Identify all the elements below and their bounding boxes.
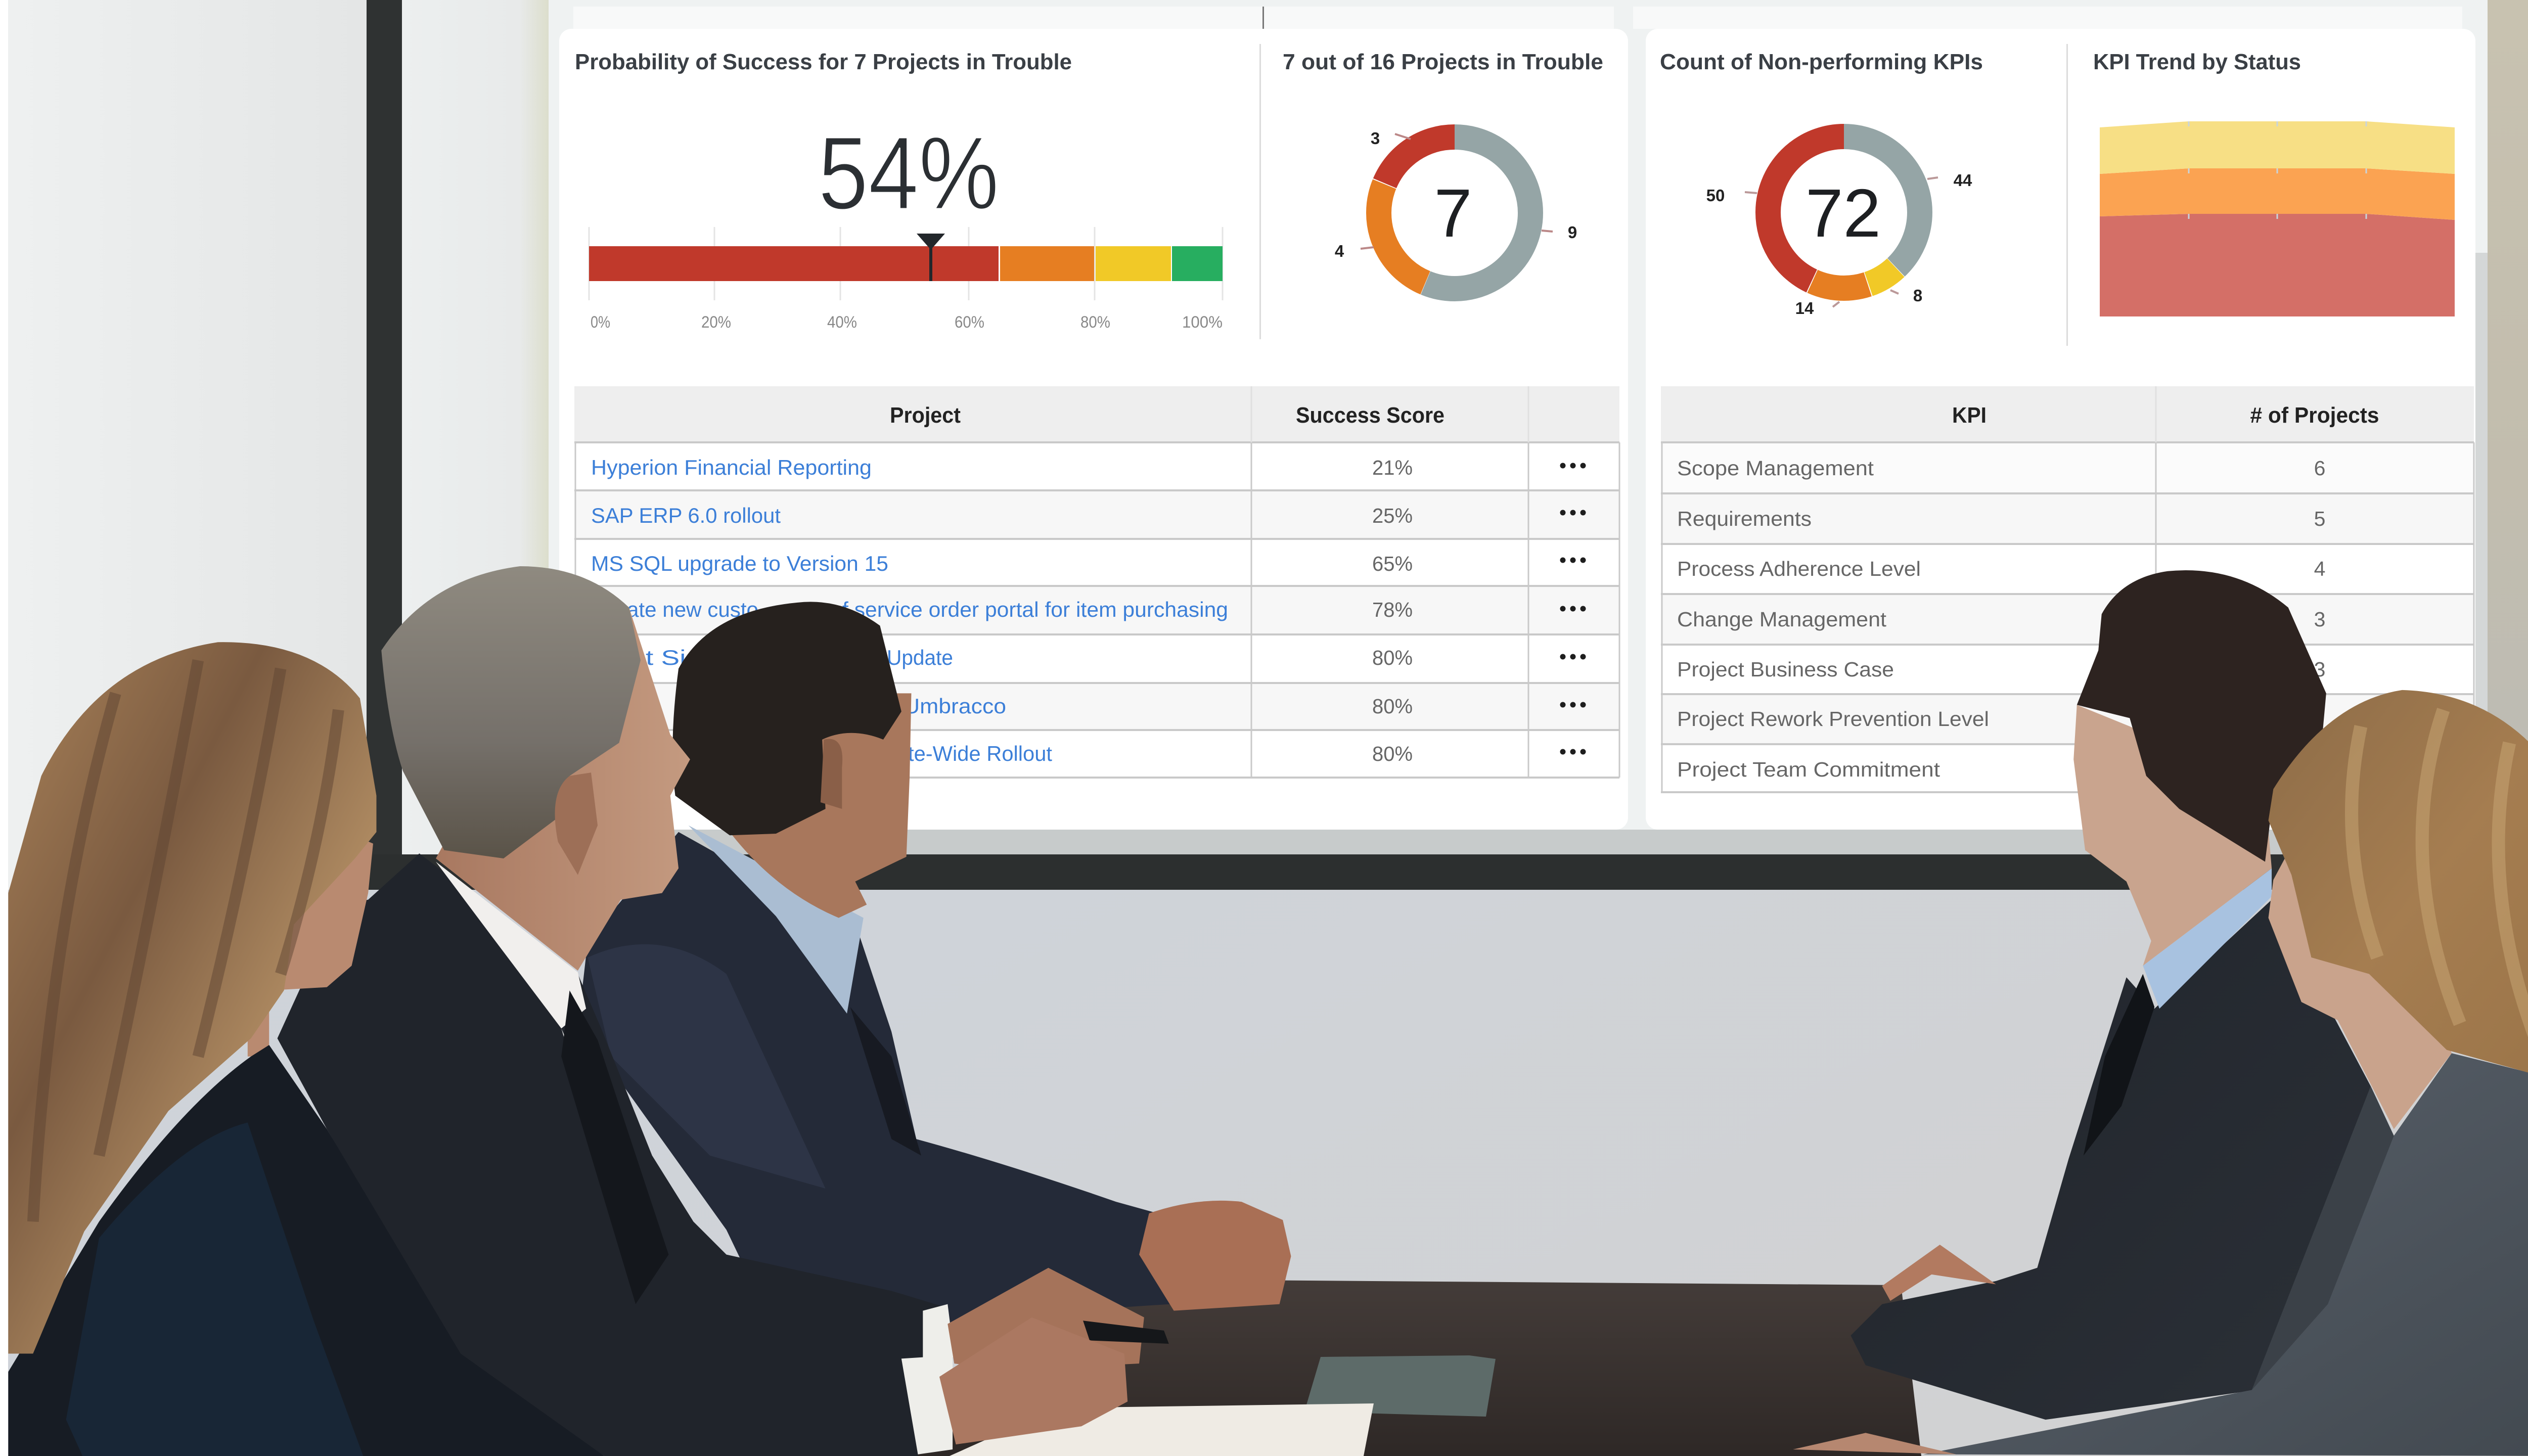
- table header: success score: Success Score: [1296, 403, 1444, 428]
- success scores: 21%: [1372, 456, 1413, 479]
- KPI project counts: 5: [2314, 507, 2325, 530]
- stacked area chart: [2100, 121, 2455, 316]
- donut chart: non-performing KPIs: 8: [1913, 286, 1922, 305]
- title: 7 out of 16: 7 out of 16 Projects in Trouble: [1283, 50, 1603, 74]
- success scores: 80%: [1372, 646, 1413, 669]
- project links: [591, 456, 1228, 765]
- table: projects: [574, 386, 1619, 778]
- person: woman with long hair, left: [8, 642, 604, 1456]
- KPI names: Change Management: [1677, 608, 1887, 631]
- KPI project counts: 3: [2314, 608, 2325, 631]
- KPI project counts: 6: [2314, 457, 2325, 480]
- table header: project: Project: [890, 403, 961, 428]
- panel: project success: [559, 29, 1628, 830]
- gauge axis labels: [591, 313, 1223, 331]
- person: man with dark suit, right: [1850, 570, 2371, 1420]
- panel: KPIs: [1646, 29, 2475, 830]
- donut chart: projects in trouble: 3: [1371, 129, 1380, 148]
- project links: te-Wide Rollout: [908, 742, 1052, 765]
- project links: t Sie: [646, 646, 701, 669]
- folder: [1304, 1355, 1496, 1417]
- project links: Umbracco: [904, 694, 1006, 718]
- person: woman with blonde hair, right: [1793, 690, 2528, 1456]
- table header: number of projects: # of Projects: [2250, 403, 2379, 428]
- KPI project counts: 3: [2314, 658, 2325, 681]
- KPI project counts: [2314, 457, 2325, 681]
- person: dark-haired man: [581, 602, 1291, 1436]
- success scores: 65%: [1372, 552, 1413, 575]
- KPI names: Process Adherence Level: [1677, 557, 1921, 580]
- project links: MS SQL upgrade to Version 15: [591, 552, 888, 575]
- success scores: 80%: [1372, 742, 1413, 765]
- donut chart: non-performing KPIs: 14: [1795, 299, 1814, 317]
- table: KPIs: [1661, 386, 2474, 792]
- KPI names: Project Rework Prevention Level: [1677, 707, 1989, 731]
- title: non-performing KPIs: Count of Non-performing KPIs: [1660, 50, 1983, 74]
- gauge axis labels: 40%: [827, 313, 857, 331]
- big number: 54 percent: 54%: [818, 115, 999, 231]
- success scores: [1372, 456, 1413, 765]
- donut chart: non-performing KPIs: 50: [1706, 186, 1725, 205]
- row action icons: [1560, 463, 1586, 754]
- gauge axis labels: 80%: [1080, 313, 1110, 331]
- donut chart: non-performing KPIs: [1706, 136, 1972, 317]
- title: KPI trend: KPI Trend by Status: [2093, 50, 2301, 74]
- KPI names: [1677, 457, 1989, 781]
- gauge axis labels: 0%: [591, 313, 610, 331]
- KPI names: Project Business Case: [1677, 658, 1894, 681]
- gauge axis labels: 60%: [955, 313, 984, 331]
- bullet gauge chart: [589, 227, 1223, 300]
- project links: SAP ERP 6.0 rollout: [591, 504, 781, 527]
- success scores: 80%: [1372, 695, 1413, 718]
- title: probability of success: Probability of Success for 7 Projects in Trouble: [575, 50, 1072, 74]
- donut chart: non-performing KPIs: 72: [1805, 175, 1881, 251]
- donut chart: projects in trouble: 7: [1434, 175, 1472, 251]
- conference table: [910, 1279, 1921, 1456]
- project links: ate new custo: [627, 598, 758, 621]
- display screen background: [549, 0, 2488, 854]
- KPI names: Scope Management: [1677, 457, 1874, 480]
- project links: f service order portal for item purchasing: [842, 598, 1228, 621]
- success scores: 78%: [1372, 598, 1413, 621]
- donut chart: non-performing KPIs: 44: [1954, 171, 1972, 190]
- gauge axis labels: 100%: [1182, 313, 1223, 331]
- success scores: 25%: [1372, 504, 1413, 527]
- table header: KPI: KPI: [1952, 403, 1987, 428]
- person: grey-haired man: [278, 566, 1169, 1456]
- donut chart: projects in trouble: 9: [1568, 223, 1577, 242]
- paper: [950, 1403, 1374, 1456]
- KPI names: Requirements: [1677, 507, 1812, 530]
- donut chart: projects in trouble: [1335, 129, 1577, 289]
- gauge axis labels: 20%: [701, 313, 731, 331]
- KPI project counts: 4: [2314, 557, 2325, 580]
- donut chart: projects in trouble: 4: [1335, 242, 1344, 260]
- project links: Hyperion Financial Reporting: [591, 456, 872, 479]
- project links: Update: [887, 646, 953, 669]
- KPI names: Project Team Commitment: [1677, 758, 1940, 781]
